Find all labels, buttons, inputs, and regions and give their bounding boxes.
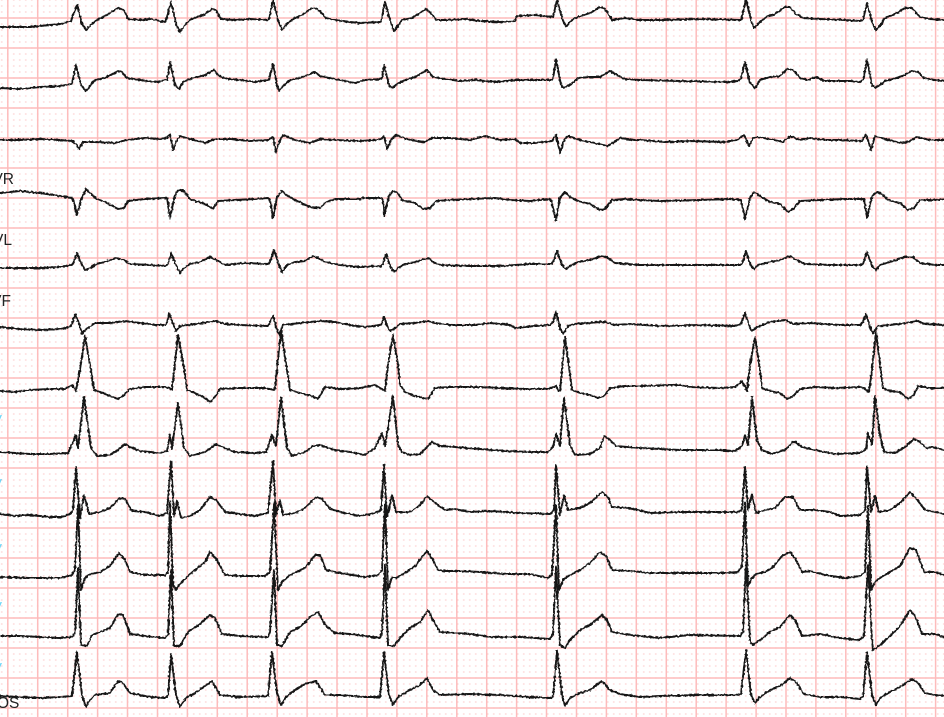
trace: lead III: [0, 134, 944, 153]
trace: lead aVL: [0, 250, 944, 273]
trace: lead V3: [0, 461, 944, 518]
trace: lead I: [0, 0, 944, 32]
trace: lead V2: [0, 396, 944, 456]
trace: lead II: [0, 59, 944, 91]
trace: lead V1: [0, 330, 944, 402]
trace: lead V6: [0, 650, 944, 707]
trace: lead aVR: [0, 189, 944, 220]
trace: lead aVF: [0, 312, 944, 335]
trace: lead V5: [0, 562, 944, 650]
trace: lead V4: [0, 502, 944, 590]
